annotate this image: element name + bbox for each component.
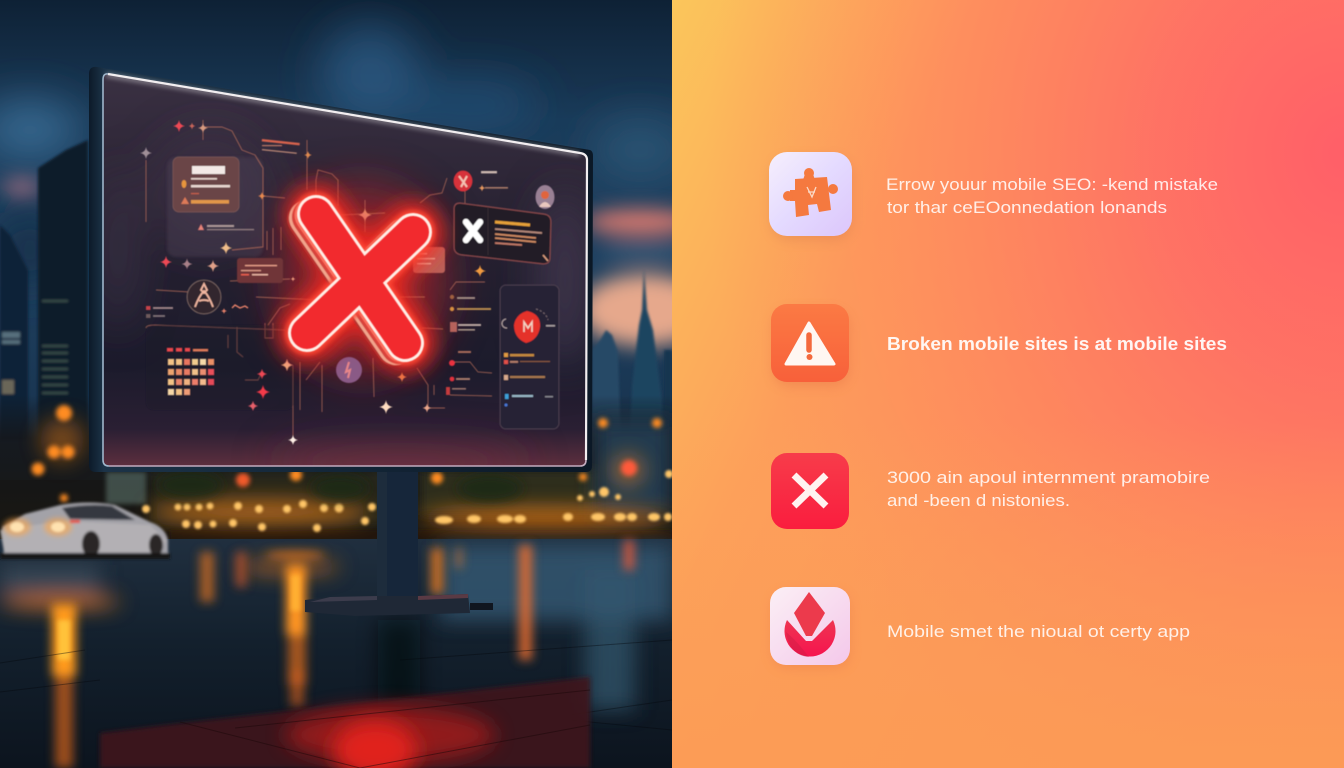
red screen reflection on floor bbox=[100, 677, 590, 768]
legend labels bbox=[146, 305, 248, 318]
item 3: red X icon tile bbox=[771, 453, 849, 529]
item 1 text bbox=[886, 176, 1218, 217]
icon: puzzle piece bbox=[783, 168, 838, 217]
left photo scene: billboard in night city bbox=[0, 0, 710, 768]
blurred skyline buildings bbox=[0, 140, 672, 432]
item 2 text: Broken mobile sites is at mobile sites bbox=[887, 334, 1227, 354]
sparkle stars bbox=[140, 120, 486, 445]
red avatar and label bbox=[454, 170, 508, 192]
billboard frame bbox=[89, 67, 593, 472]
item 3 text bbox=[887, 469, 1210, 510]
maroon note card bbox=[237, 258, 283, 283]
item 4: app flame icon tile bbox=[770, 587, 850, 668]
dusk sky with clouds bbox=[0, 0, 672, 438]
item 3 text: and -been d nistonies. bbox=[887, 492, 1070, 510]
icon: warning triangle bbox=[786, 323, 834, 364]
right gradient panel bbox=[672, 0, 1344, 768]
circuit lines bbox=[146, 120, 492, 440]
screen interface detail layer bbox=[140, 120, 559, 445]
parked white car bbox=[0, 502, 170, 559]
round emblem icon bbox=[187, 280, 221, 314]
icon: flame drop bbox=[784, 592, 836, 657]
item 4 text: Mobile smet the nioual ot certy app bbox=[887, 623, 1190, 641]
red glow around X bbox=[307, 214, 413, 343]
item 2: warning icon tile bbox=[771, 304, 849, 386]
item 1 text: Errow youur mobile SEO: -kend mistake bbox=[886, 176, 1218, 194]
billboard stand: pole and base bbox=[305, 470, 493, 616]
pink avatar bbox=[536, 185, 554, 209]
small info card bbox=[173, 157, 254, 230]
purple badge bbox=[336, 357, 362, 383]
calendar grid panel bbox=[146, 325, 294, 410]
top heading lines bbox=[262, 139, 300, 154]
middle-right list bbox=[446, 295, 491, 395]
item 1: puzzle icon tile bbox=[769, 152, 852, 240]
icon: white X bbox=[794, 475, 826, 506]
phone mockup panel bbox=[500, 285, 559, 429]
billboard screen bbox=[100, 60, 590, 474]
street band with bokeh lights bbox=[0, 395, 673, 540]
wet floor with reflections bbox=[0, 539, 672, 768]
salmon note card bbox=[413, 247, 445, 273]
item 3 text: 3000 ain apoul internment pramobire bbox=[887, 469, 1210, 487]
big red neon X bbox=[307, 214, 413, 343]
item 1 text: tor thar ceEOonnedation lonands bbox=[887, 199, 1167, 217]
billboard bright edge highlights bbox=[103, 74, 587, 466]
X backing layers bbox=[305, 215, 410, 348]
translucent upper-left panel bbox=[167, 157, 263, 257]
error card with white X bbox=[454, 203, 551, 264]
